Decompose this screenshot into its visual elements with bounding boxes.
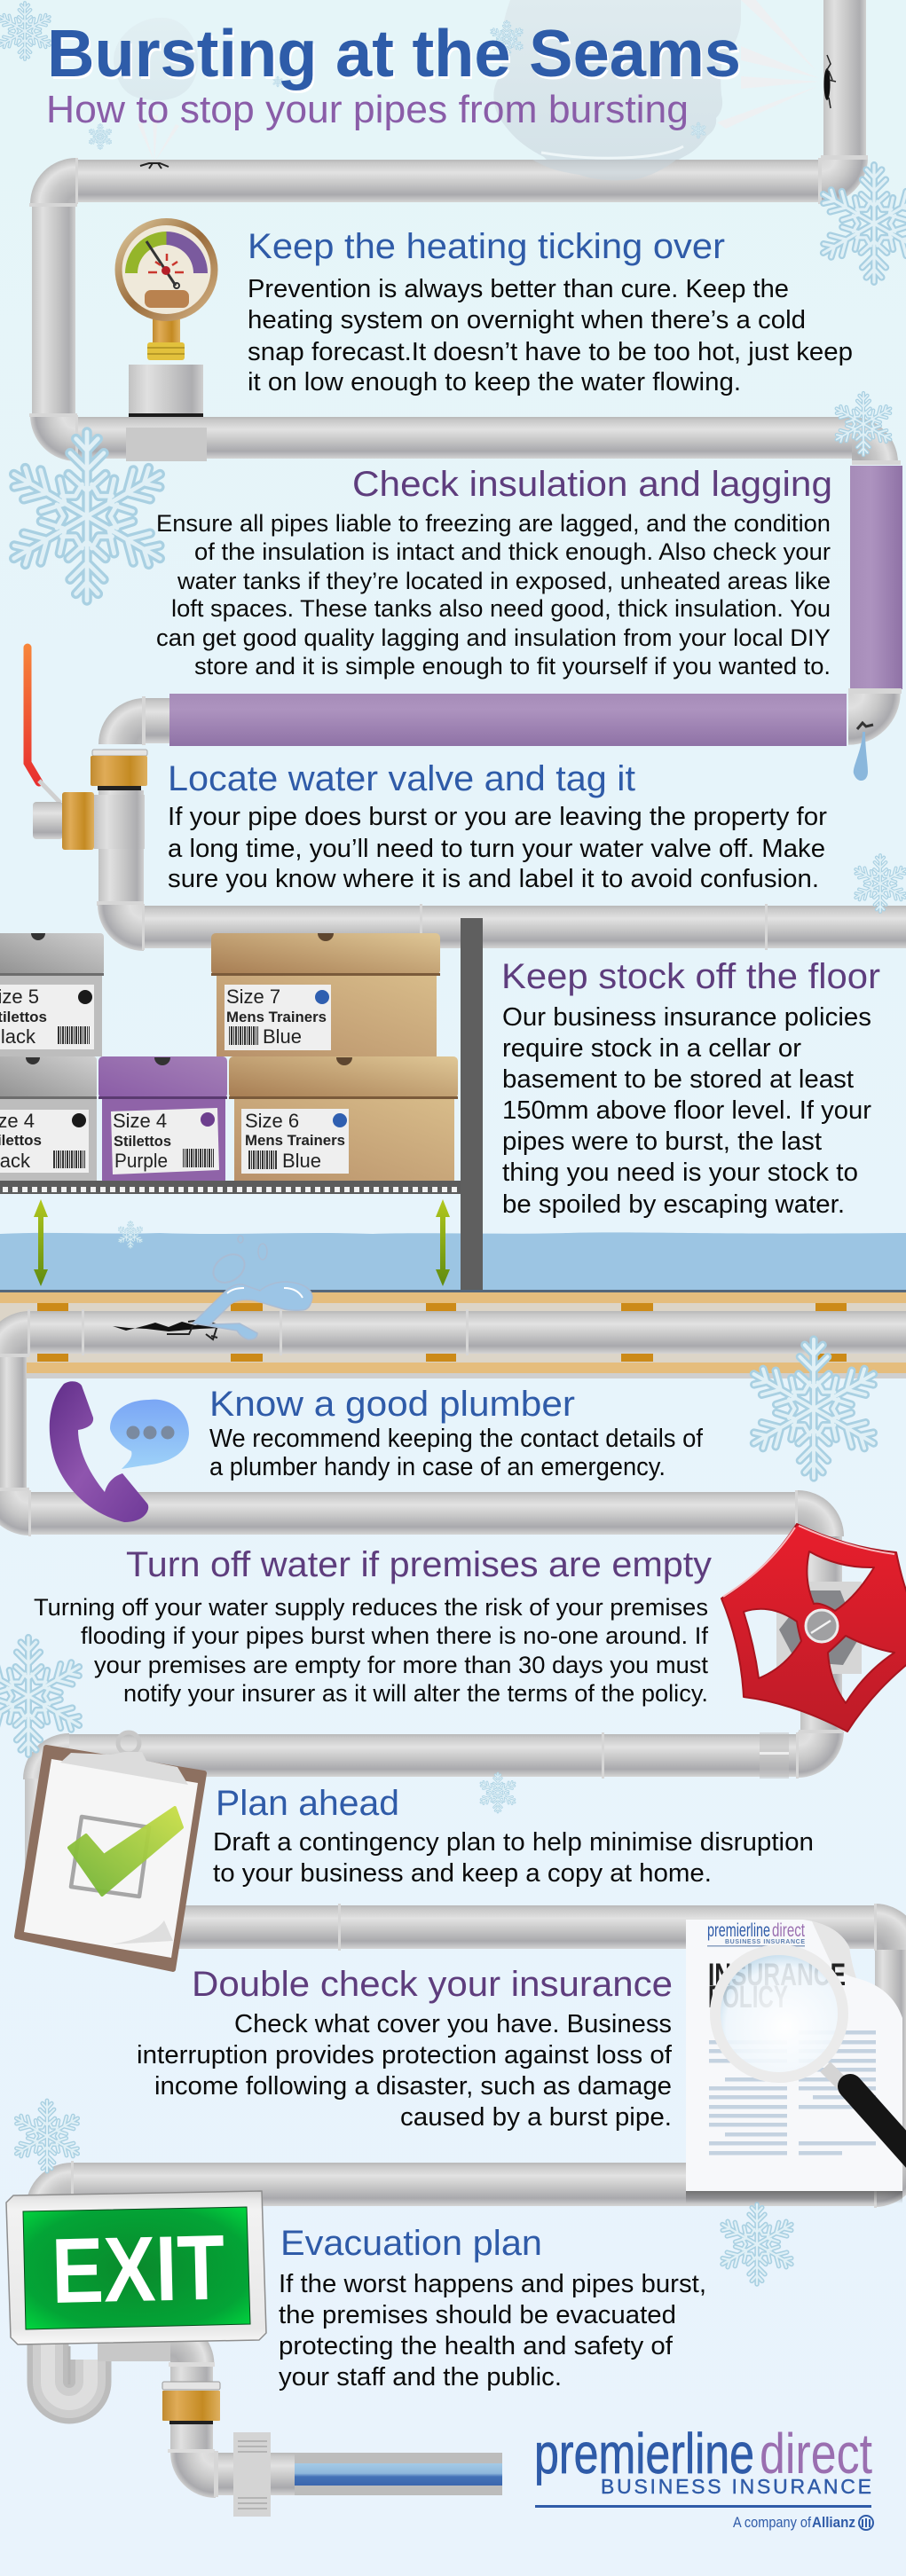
title: Bursting at the Seams: [47, 16, 741, 90]
heading: Turn off water if premises are empty: [126, 1545, 712, 1584]
logo: premierline direct business insurance: BUSINESS INSURANCE: [601, 2475, 871, 2498]
box: blue mens trainers size 7: [211, 933, 440, 1056]
body text: flooding if your pipes burst when there is no-one around. If: [81, 1622, 709, 1649]
body text: can get good quality lagging and insulation from your local DIY: [156, 624, 831, 651]
burst pipe crack and splash: [113, 1236, 312, 1339]
heading: Check insulation and lagging: [352, 465, 832, 504]
body text: [137, 2010, 672, 2132]
body text: store and it is simple enough to fit yourself if you wanted to.: [194, 653, 831, 679]
section: keep stock off the floor: [501, 957, 880, 1219]
body text: notify your insurer as it will alter the terms of the policy.: [123, 1680, 708, 1707]
section: keep the heating ticking over: [248, 227, 853, 397]
heading: Keep the heating ticking over: [248, 227, 725, 266]
body text: a plumber handy in case of an emergency.: [209, 1453, 666, 1481]
logo: premierline direct business insurance: A company of: [733, 2514, 811, 2531]
box: purple stilettos size 4: [98, 1056, 227, 1181]
insurance policy document: INSURANCE: [708, 1958, 846, 1992]
logo: premierline direct business insurance: [534, 2422, 873, 2531]
magnifying glass: [715, 1950, 906, 2160]
body text: [502, 1003, 872, 1219]
body text: require stock in a cellar or: [502, 1034, 802, 1063]
body text: of the insulation is intact and thick enough. Also check your: [194, 538, 831, 565]
pipe run: insurance section: [26, 1904, 906, 2209]
body text: sure you know where it is and label it to avoid confusion.: [168, 865, 819, 893]
box: blue mens trainers size 7: Size 7: [226, 986, 280, 1008]
insurance policy document: premierline: [707, 1920, 770, 1941]
insurance policy document: POLICY: [708, 1980, 788, 2014]
water flood: [0, 1232, 906, 1290]
body text: If your pipe does burst or you are leaving the property for: [168, 803, 828, 831]
body text: [213, 1828, 814, 1888]
body text: [209, 1425, 703, 1481]
body text: snap forecast.It doesn’t have to be too hot, just keep: [248, 338, 853, 366]
pipe run: plumber section: [0, 1488, 844, 1733]
insurance policy document: BUSINESS INSURANCE: [725, 1939, 805, 1945]
water valve: [28, 648, 147, 903]
exit sign: [6, 2191, 266, 2344]
box: blue mens trainers size 6: Size 6: [245, 1110, 299, 1132]
box: blue mens trainers size 6: [229, 1056, 458, 1181]
red stop valve wheel: [721, 1524, 906, 1732]
body text: interruption provides protection against loss of: [137, 2041, 672, 2069]
height arrows: [34, 1199, 450, 1286]
body text: 150mm above floor level. If your: [502, 1096, 872, 1125]
lagged pipe: [98, 466, 902, 746]
burst rays: [138, 0, 819, 162]
body text: protecting the health and safety of: [279, 2332, 673, 2360]
body text: Check what cover you have. Business: [234, 2010, 672, 2038]
exit sign: EXIT: [51, 2217, 225, 2323]
body text: caused by a burst pipe.: [400, 2103, 672, 2132]
box: purple stilettos size 4: Purple: [114, 1150, 168, 1172]
heading: Keep stock off the floor: [501, 957, 880, 996]
box: black stilettos size 5: [0, 933, 104, 1056]
section: locate water valve and tag it: [168, 759, 828, 893]
insurance policy document: [686, 1920, 902, 2203]
pressure gauge: [115, 218, 218, 461]
pipe run: top section: [29, 0, 901, 465]
body text: [168, 803, 828, 893]
telephone and speech bubble icon: [50, 1381, 189, 1522]
body text: loft spaces. These tanks also need good, thick insulation. You: [171, 595, 831, 622]
box: black stilettos size 4: [0, 1056, 97, 1181]
box: blue mens trainers size 7: Mens Trainers: [226, 1009, 327, 1025]
box: purple stilettos size 4: Size 4: [113, 1110, 167, 1132]
body text: to your business and keep a copy at home.: [213, 1859, 712, 1888]
cloud over pipe: [532, 160, 676, 180]
body text: Draft a contingency plan to help minimise disruption: [213, 1828, 814, 1857]
box: blue mens trainers size 6: Mens Trainers: [245, 1132, 345, 1149]
section: plan ahead: [213, 1784, 814, 1888]
body text: If the worst happens and pipes burst,: [279, 2270, 706, 2298]
box: blue mens trainers size 7: Blue: [263, 1025, 302, 1048]
body text: your staff and the public.: [279, 2363, 562, 2391]
body text: [279, 2270, 706, 2391]
body text: income following a disaster, such as damage: [154, 2072, 672, 2101]
body text: thing you need is your stock to: [502, 1158, 858, 1187]
body text: [248, 275, 853, 397]
heading: Plan ahead: [216, 1784, 399, 1823]
clipboard with tick: [17, 1732, 204, 1969]
body text: water tanks if they’re located in exposed, unheated areas like: [177, 568, 831, 594]
body text: [34, 1594, 709, 1707]
insurance policy document: direct: [772, 1920, 805, 1941]
section: turn off water if premises are empty: [34, 1545, 712, 1707]
heading: Double check your insurance: [192, 1965, 673, 2004]
shelving unit: [0, 918, 483, 1290]
logo: premierline direct business insurance: Allianz: [812, 2514, 855, 2531]
body text: Turning off your water supply reduces the risk of your premises: [34, 1594, 708, 1621]
section: know a good plumber: [209, 1385, 703, 1481]
body text: pipes were to burst, the last: [502, 1127, 822, 1156]
logo: premierline direct business insurance: premierline: [534, 2422, 754, 2486]
heading: Know a good plumber: [209, 1385, 575, 1424]
waste trap pipe: [48, 2321, 502, 2517]
body text: it on low enough to keep the water flowing.: [248, 368, 741, 397]
body text: a long time, you’ll need to turn your water valve off. Make: [168, 835, 825, 863]
heading: Locate water valve and tag it: [168, 759, 635, 798]
section: check insulation and lagging: [156, 465, 832, 679]
box: blue mens trainers size 6: Blue: [282, 1150, 321, 1172]
box: purple stilettos size 4: Stilettos: [114, 1133, 171, 1150]
body text: We recommend keeping the contact details of: [209, 1425, 703, 1453]
pipe run: plan ahead section: [23, 1730, 844, 1907]
section: evacuation plan: [279, 2224, 706, 2391]
logo: premierline direct business insurance: direct: [760, 2422, 872, 2486]
body text: be spoiled by escaping water.: [502, 1190, 845, 1219]
body text: Prevention is always better than cure. Keep the: [248, 275, 789, 303]
pipe run: above shelves: [97, 901, 906, 951]
subtitle: How to stop your pipes from bursting: [46, 88, 689, 131]
heading: Evacuation plan: [280, 2224, 542, 2263]
body text: [156, 510, 831, 679]
body text: Ensure all pipes liable to freezing are lagged, and the condition: [156, 510, 831, 537]
pipe cracks: [140, 55, 836, 169]
body text: Our business insurance policies: [502, 1003, 871, 1032]
body text: basement to be stored at least: [502, 1065, 854, 1094]
floor and burst pipe: [0, 1290, 906, 1489]
body text: heating system on overnight when there’s a cold: [248, 306, 806, 334]
section: double check your insurance: [137, 1965, 673, 2132]
body text: the premises should be evacuated: [279, 2301, 676, 2329]
steam clouds: [114, 0, 741, 180]
pipe leak drip: [854, 723, 873, 781]
body text: your premises are empty for more than 30 days you must: [94, 1652, 709, 1678]
